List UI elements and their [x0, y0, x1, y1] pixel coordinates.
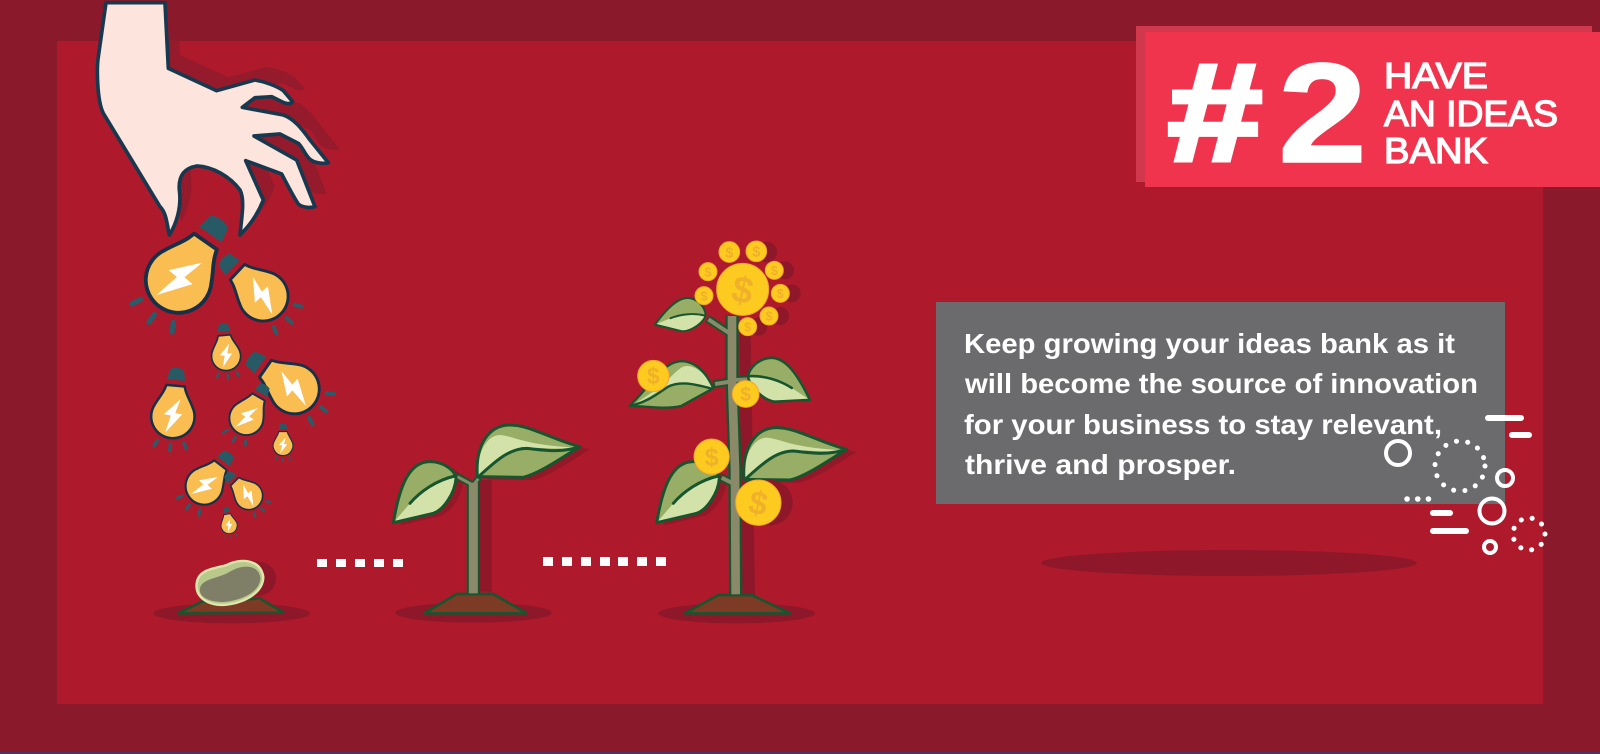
coin dollar signs: $	[771, 264, 778, 278]
heading text: HAVE	[1384, 55, 1488, 96]
coin dollar signs	[647, 245, 784, 523]
coins	[638, 241, 789, 525]
callout text: for your business to stay relevant,	[964, 409, 1442, 440]
coin dollar signs: $	[777, 287, 784, 301]
dotted connector: seed to sprout	[317, 559, 403, 567]
coin dollar signs: $	[647, 363, 660, 389]
coin dollar signs: $	[728, 267, 757, 312]
dotted connector: sprout to money plant	[543, 557, 666, 566]
callout: text box	[936, 302, 1505, 504]
coin dollar signs: $	[704, 265, 712, 279]
coin dollar signs: $	[705, 444, 719, 472]
callout text: Keep growing your ideas bank as it	[964, 328, 1455, 359]
coin dollar signs: $	[765, 310, 773, 324]
heading text	[1384, 55, 1558, 171]
heading number: 2	[1278, 34, 1367, 193]
callout text	[964, 328, 1478, 480]
sprout with two leaves	[393, 425, 590, 623]
coin dollar signs: $	[746, 483, 771, 523]
money plant with coins	[621, 241, 857, 623]
callout text: will become the source of innovation	[964, 368, 1478, 399]
callout: shadow under text box	[1041, 550, 1417, 576]
leaves	[621, 289, 847, 523]
stem	[707, 315, 750, 595]
icon: hand dropping ideas	[97, 0, 340, 235]
coin shadows	[747, 242, 801, 525]
seed on soil mound	[153, 561, 310, 623]
coin dollar signs: $	[740, 385, 751, 406]
bottom edge strip	[0, 752, 1600, 754]
coin dollar signs: $	[752, 245, 760, 261]
decorative circles and dashes	[1386, 418, 1545, 553]
callout text: thrive and prosper.	[965, 449, 1236, 480]
heading text: AN IDEAS	[1384, 93, 1558, 134]
heading number	[1168, 34, 1367, 193]
heading number: #	[1168, 36, 1262, 190]
heading text: BANK	[1384, 130, 1488, 171]
icons: falling light bulbs	[122, 201, 341, 539]
coin dollar signs: $	[725, 245, 733, 261]
coin dollar signs: $	[744, 320, 751, 334]
coin dollar signs: $	[700, 289, 708, 303]
banner: #2 have an ideas bank	[1136, 26, 1600, 193]
